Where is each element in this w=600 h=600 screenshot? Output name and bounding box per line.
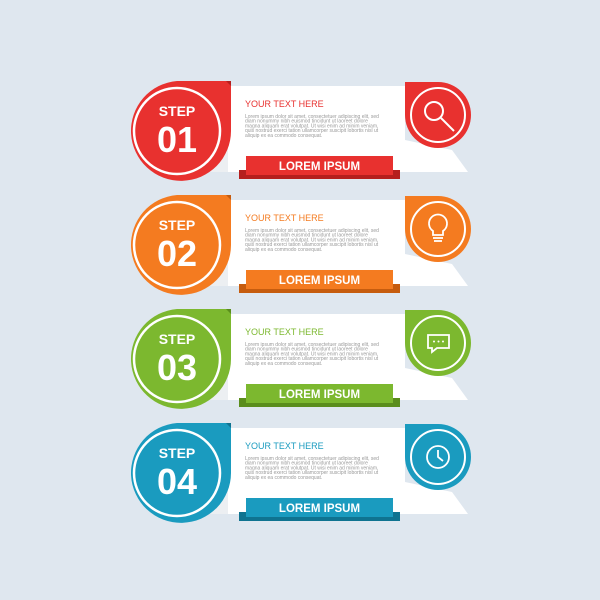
step 2 badge xyxy=(131,195,231,295)
body text xyxy=(245,228,380,253)
icon: magnifier xyxy=(405,82,471,148)
body text xyxy=(245,114,380,139)
panel: step 2 card xyxy=(200,200,468,286)
step 1 xyxy=(131,81,471,181)
icon: chat bubble xyxy=(405,310,471,376)
step 1 badge: STEP xyxy=(159,103,195,119)
heading: YOUR TEXT HERE xyxy=(245,441,324,451)
step 4 badge xyxy=(131,423,231,523)
body text xyxy=(245,456,380,481)
lorem ipsum bar: LOREM IPSUM xyxy=(279,161,360,173)
step 1 badge: 01 xyxy=(157,119,197,160)
step 3 badge: 03 xyxy=(157,347,197,388)
body text xyxy=(245,342,380,367)
step 2 badge: STEP xyxy=(159,217,195,233)
panel: step 1 card xyxy=(200,86,468,172)
panel: step 4 card xyxy=(200,428,468,514)
lorem ipsum bar xyxy=(239,270,400,293)
lorem ipsum bar: LOREM IPSUM xyxy=(279,503,360,515)
icon: light bulb xyxy=(405,196,471,262)
lorem ipsum bar xyxy=(239,384,400,407)
lorem ipsum bar: LOREM IPSUM xyxy=(279,389,360,401)
heading: YOUR TEXT HERE xyxy=(245,213,324,223)
lorem ipsum bar xyxy=(239,498,400,521)
step 2 badge: 02 xyxy=(157,233,197,274)
step 1 badge xyxy=(131,81,231,181)
heading: YOUR TEXT HERE xyxy=(245,99,324,109)
step 3 badge: STEP xyxy=(159,331,195,347)
heading: YOUR TEXT HERE xyxy=(245,327,324,337)
step 4 xyxy=(131,423,471,523)
step 2 xyxy=(131,195,471,295)
panel: step 3 card xyxy=(200,314,468,400)
lorem ipsum bar xyxy=(239,156,400,179)
step 3 xyxy=(131,309,471,409)
icon: clock xyxy=(405,424,471,490)
lorem ipsum bar: LOREM IPSUM xyxy=(279,275,360,287)
step 3 badge xyxy=(131,309,231,409)
step 4 badge: 04 xyxy=(157,461,197,502)
step 4 badge: STEP xyxy=(159,445,195,461)
